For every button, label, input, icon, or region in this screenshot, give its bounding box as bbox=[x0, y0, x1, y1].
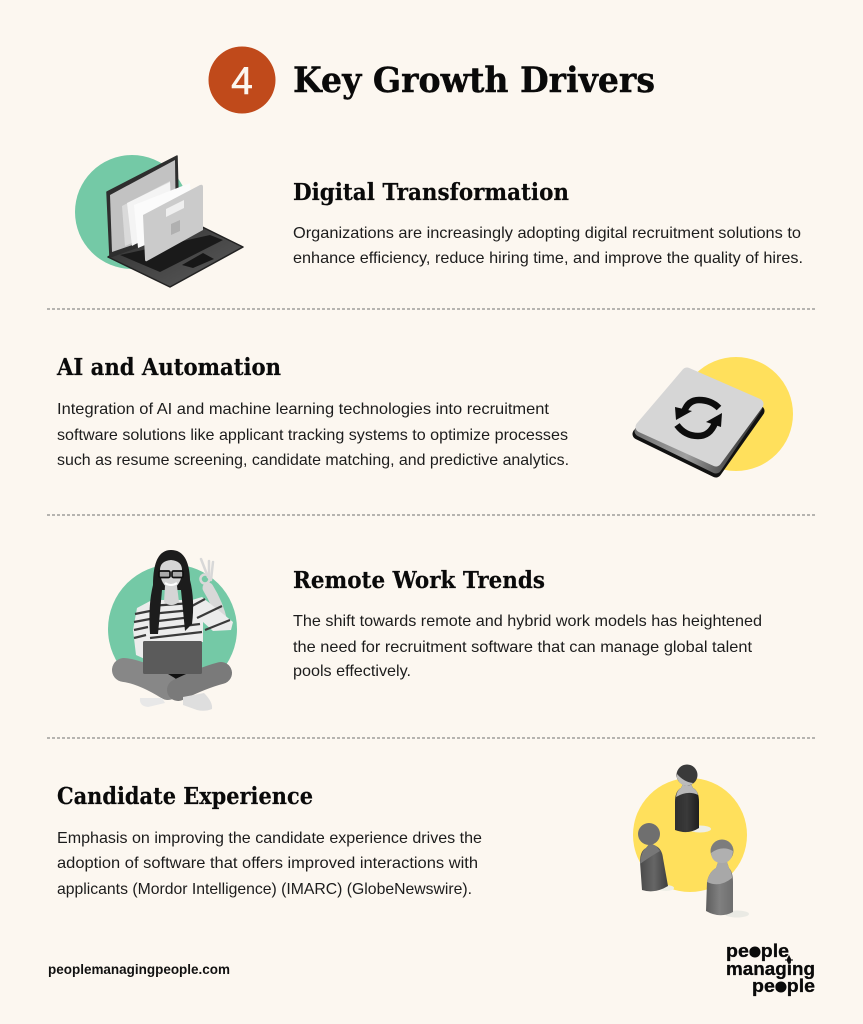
body text: software solutions like applicant tracking systems to optimize processes bbox=[57, 427, 568, 444]
section: ai and automation bbox=[56, 354, 569, 469]
face bbox=[160, 560, 182, 590]
body text bbox=[293, 225, 803, 267]
illustration: three wooden pegs bbox=[633, 764, 749, 918]
illustration: refresh key bbox=[638, 357, 793, 472]
heading: Remote Work Trends bbox=[293, 567, 545, 594]
body text: Integration of AI and machine learning technologies into recruitment bbox=[57, 401, 550, 418]
heading: AI and Automation bbox=[56, 354, 281, 381]
laptop bbox=[143, 641, 202, 674]
body text: pools effectively. bbox=[293, 663, 411, 680]
section: digital transformation bbox=[293, 179, 803, 267]
body text bbox=[57, 401, 569, 469]
body text: The shift towards remote and hybrid work models has heightened bbox=[293, 613, 762, 630]
hair bbox=[149, 550, 193, 634]
title bbox=[208, 46, 655, 114]
icon: number badge bbox=[208, 46, 276, 114]
body text: adoption of software that offers improved interactions with bbox=[57, 855, 478, 872]
body text bbox=[293, 613, 762, 680]
shoes bbox=[140, 698, 165, 707]
section: remote work trends bbox=[293, 567, 762, 680]
icon: number badge: 4 bbox=[231, 60, 253, 103]
peg top bbox=[675, 764, 711, 832]
raised arm and hand bbox=[200, 559, 222, 622]
body text: enhance efficiency, reduce hiring time, and improve the quality of hires. bbox=[293, 250, 803, 267]
body text: such as resume screening, candidate matching, and predictive analytics. bbox=[57, 452, 569, 469]
logo: people managing people: people bbox=[726, 940, 789, 961]
heading: Digital Transformation bbox=[293, 179, 569, 206]
peg left bbox=[638, 823, 674, 891]
logo: people managing people: people bbox=[752, 975, 815, 996]
illustration: laptop with documents bbox=[75, 155, 243, 287]
body text: applicants (Mordor Intelligence) (IMARC) (GlobeNewswire). bbox=[57, 881, 472, 898]
body text: Emphasis on improving the candidate experience drives the bbox=[57, 830, 482, 847]
section: candidate experience bbox=[57, 783, 482, 898]
shirt bbox=[133, 597, 233, 660]
logo: people managing people bbox=[726, 940, 815, 996]
logo: people managing people: managing bbox=[726, 958, 815, 979]
dark lap bbox=[148, 672, 196, 688]
heading: Candidate Experience bbox=[57, 783, 313, 810]
icon: refresh arrows bbox=[675, 400, 722, 436]
illustration: woman with laptop bbox=[108, 550, 237, 711]
heading: key growth drivers: Key Growth Drivers bbox=[293, 60, 655, 101]
body text: Organizations are increasingly adopting digital recruitment solutions to bbox=[293, 225, 801, 242]
body text bbox=[57, 830, 482, 898]
body text: the need for recruitment software that can manage global talent bbox=[293, 639, 753, 656]
peg right bbox=[706, 840, 749, 918]
footer url: peoplemanagingpeople.com bbox=[48, 962, 230, 977]
legs bbox=[124, 670, 221, 690]
